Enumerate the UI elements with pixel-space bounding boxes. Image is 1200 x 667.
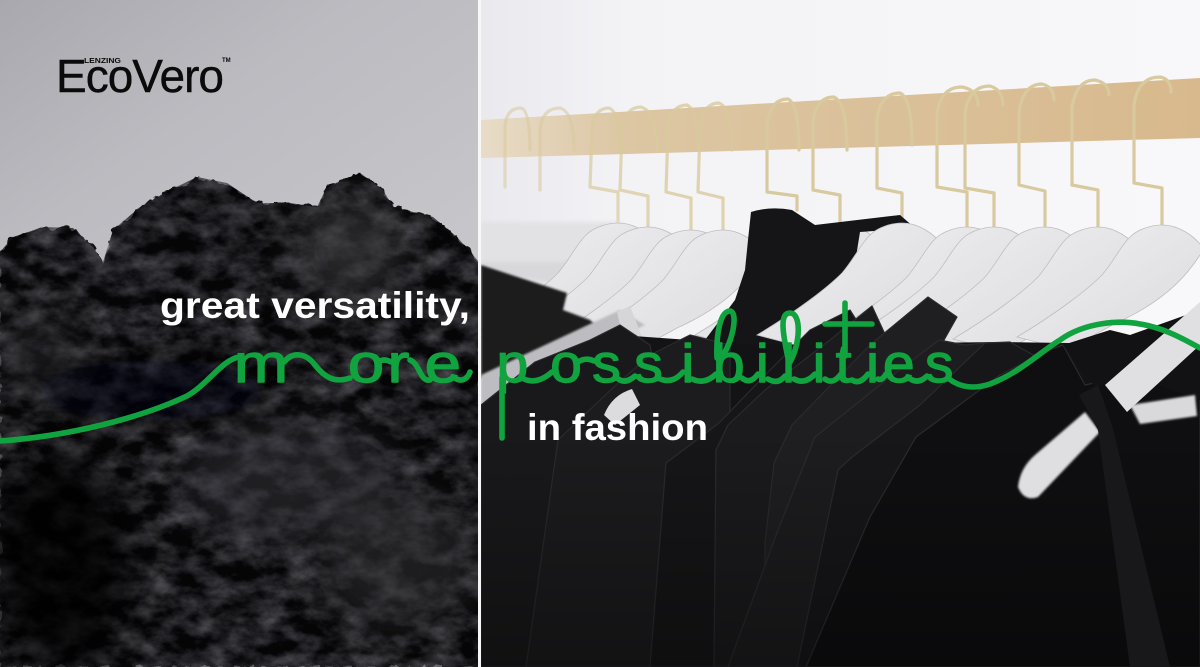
script word: more: more bbox=[234, 333, 461, 394]
heading: great versatility,: great versatility, bbox=[160, 285, 470, 326]
panel divider bbox=[478, 0, 481, 667]
green script line: more possibilities bbox=[0, 303, 1200, 441]
small hanger tip bbox=[604, 389, 640, 425]
panel: fibre photo bbox=[0, 0, 480, 667]
right garment collar bbox=[1063, 310, 1200, 400]
back hangers bbox=[481, 222, 870, 338]
fibre texture bbox=[0, 170, 480, 667]
far-left sweater bbox=[481, 265, 600, 378]
garments on rail bbox=[481, 297, 1200, 667]
logo: Lenzing EcoVero: TM bbox=[222, 58, 231, 64]
script word: possibilities: possibilities bbox=[497, 333, 953, 394]
blurred far-left hangers bbox=[481, 222, 621, 290]
garment strap bbox=[1079, 385, 1170, 667]
far hanger band bbox=[481, 310, 645, 412]
heading: in fashion: in fashion bbox=[527, 407, 708, 448]
front hangers bbox=[757, 223, 1200, 352]
brass hooks bbox=[505, 77, 1171, 230]
hanger lower tip bbox=[1018, 412, 1100, 498]
logo: Lenzing EcoVero: LENZING bbox=[84, 56, 121, 65]
black fibre tuft bbox=[0, 173, 480, 667]
panel: clothes rail photo bbox=[473, 0, 1200, 667]
front right hanger bbox=[1105, 302, 1200, 412]
wall bbox=[481, 0, 1082, 404]
logo: Lenzing EcoVero: EcoVero bbox=[56, 50, 224, 102]
garment label bbox=[1130, 395, 1197, 424]
wooden rail bbox=[481, 78, 1200, 158]
garment shadow bbox=[481, 555, 1200, 667]
turtleneck sweater bbox=[706, 208, 910, 345]
grey studio background bbox=[0, 0, 478, 667]
cloth loop bbox=[617, 306, 642, 336]
swoosh and connecting flourishes bbox=[0, 303, 1200, 441]
